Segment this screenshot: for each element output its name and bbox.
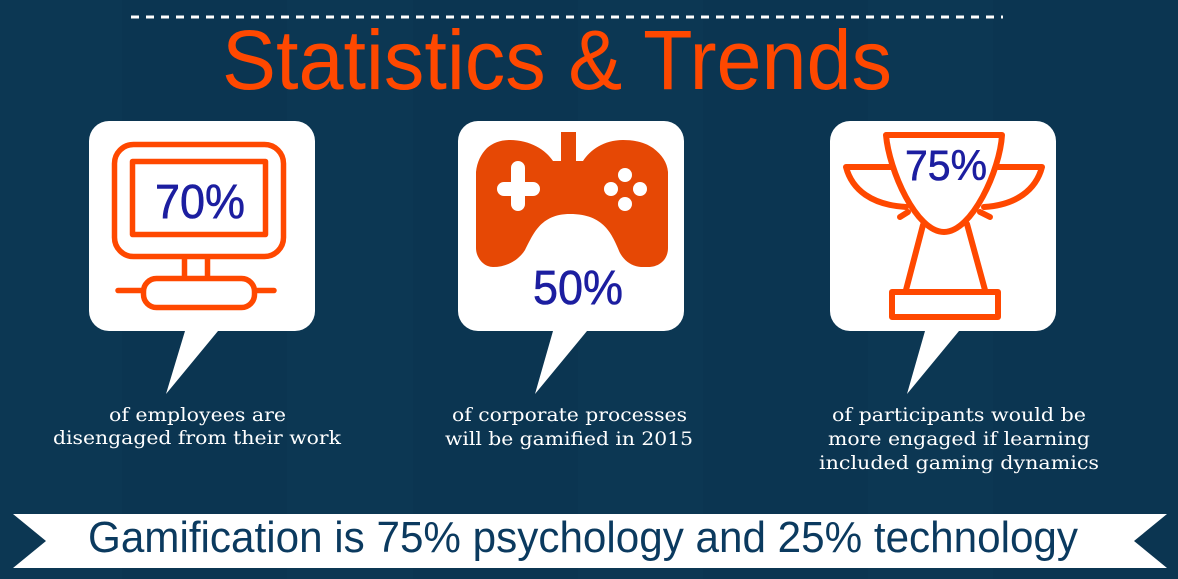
stat: 50%: 50% [533, 262, 623, 315]
speech bubble [89, 121, 315, 394]
speech bubble [830, 121, 1056, 394]
speech bubble [458, 121, 684, 394]
panel: 75% participants [819, 121, 1099, 474]
ribbon [13, 514, 1167, 568]
caption: employees [53, 405, 342, 449]
title: Statistics & Trends [222, 13, 892, 107]
caption: employees: disengaged from their work [53, 428, 342, 449]
banner [13, 513, 1167, 568]
caption: processes: of corporate processes [452, 405, 687, 426]
caption: processes [445, 405, 693, 450]
panel: 70% employees [53, 121, 342, 449]
caption: participants: more engaged if learning [828, 429, 1090, 450]
stat: 75%: 75% [905, 142, 987, 190]
caption: processes: will be gamified in 2015 [445, 429, 693, 450]
icon: trophy [846, 135, 1042, 317]
panel: 50% processes [445, 121, 693, 450]
caption: participants [819, 405, 1099, 474]
banner text: Gamification is 75% psychology and 25% technology [88, 513, 1078, 562]
stat: 70%: 70% [155, 176, 245, 229]
caption: employees: of employees are [109, 405, 286, 426]
caption: participants: included gaming dynamics [819, 453, 1099, 474]
icon: computer monitor [114, 144, 284, 308]
icon: game controller [476, 132, 668, 267]
caption: participants: of participants would be [832, 405, 1086, 426]
